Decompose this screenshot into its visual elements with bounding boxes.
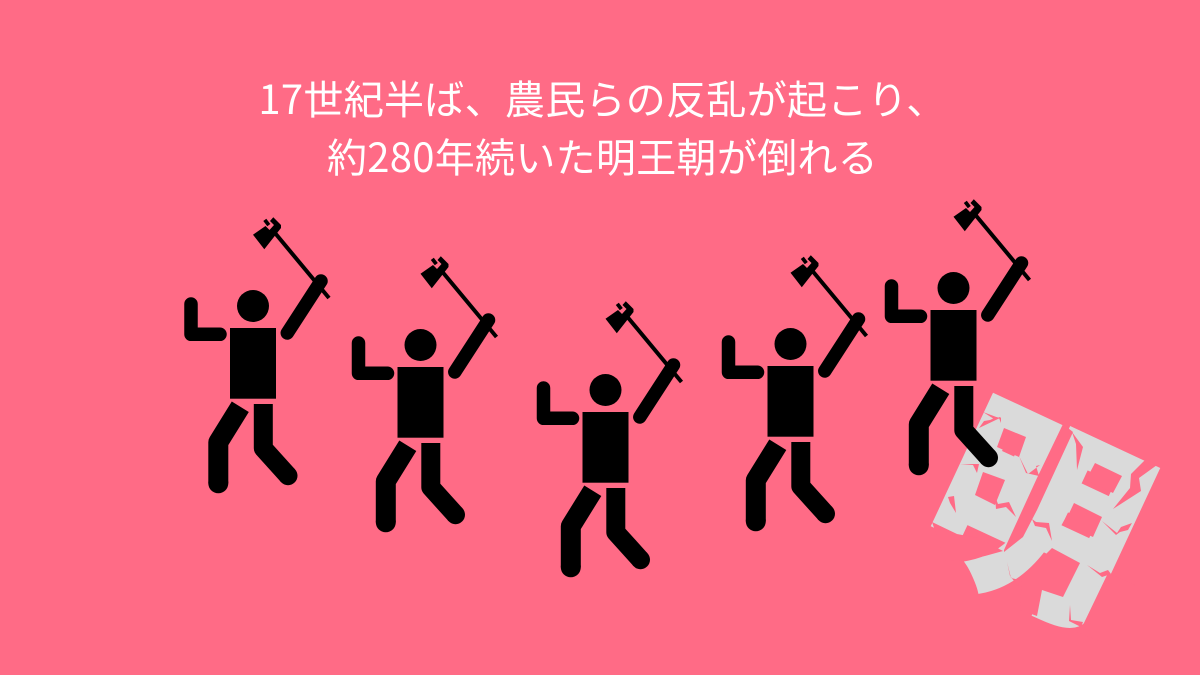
figure: peasant with axe 1 [191, 217, 329, 493]
figure: peasant with axe 4 [728, 255, 866, 531]
title: 17世紀半ば、農民らの反乱が起こり、 [258, 68, 947, 126]
cracks [948, 412, 1157, 627]
figure: peasant with axe 5 [892, 199, 1030, 475]
counters and gaps of the character [932, 424, 1135, 645]
icon: cracked Ming character: 明 [891, 327, 1195, 674]
title: 約280年続いた明王朝が倒れる [327, 126, 878, 184]
figure: peasant with axe 3 [544, 301, 682, 577]
title [258, 68, 947, 184]
figure: peasant with axe 2 [358, 256, 496, 532]
